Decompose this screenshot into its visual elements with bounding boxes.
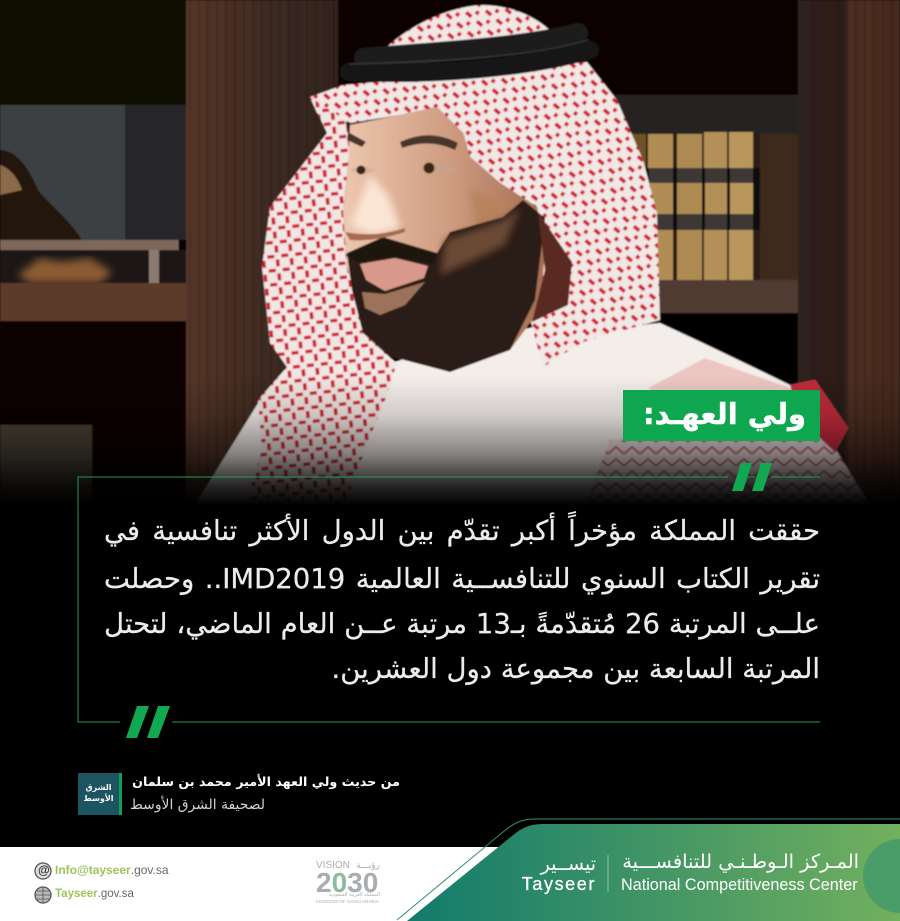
center name — [621, 850, 859, 894]
green banner — [407, 824, 900, 921]
source text: من حديث ولي العهد الأمير محمد بن سلمان — [132, 774, 400, 789]
shemagh: right drape — [310, 62, 660, 367]
lips — [360, 258, 428, 291]
quote text: حققت المملكة مؤخراً أكبر تقدّم بين الدول الأكثر تنافسية في — [104, 515, 820, 547]
quote text: علــى المرتبة 26 مُتقدّمةً بـ13 مرتبة عــن العام الماضي، لتحتل — [104, 608, 820, 640]
shemagh: left drape — [245, 97, 397, 505]
tayseer logo: Tayseer — [522, 874, 596, 894]
footer band — [0, 818, 900, 921]
contact website — [34, 886, 134, 904]
face — [343, 107, 545, 372]
igal — [349, 33, 590, 73]
center name: National Competitiveness Center — [621, 876, 858, 894]
vision 2030 logo: رؤيـــة — [356, 861, 380, 871]
white footer panel — [0, 847, 506, 921]
source text — [130, 774, 400, 813]
contact email: Info@tayseer.gov.sa — [55, 863, 169, 877]
tayseer logo — [522, 853, 596, 894]
icon: opening quote mark — [732, 463, 772, 491]
quote frame — [78, 463, 820, 738]
heading tag: crown prince — [623, 390, 820, 441]
heading tag: crown prince: ولي العهـد: — [643, 397, 806, 431]
thobe shoulders — [195, 320, 870, 505]
source text: لصحيفة الشرق الأوسط — [130, 797, 265, 813]
vision 2030 logo: KINGDOM OF SAUDI ARABIA — [316, 899, 379, 904]
contact website: Tayseer.gov.sa — [55, 888, 134, 900]
vision 2030 logo — [316, 860, 380, 904]
left shelf background — [0, 0, 338, 505]
contact email — [34, 862, 169, 880]
vision 2030 logo: المملكة العربية السعودية — [329, 892, 380, 898]
shemagh: crown — [388, 5, 555, 60]
quote text: المرتبة السابعة بين مجموعة دول العشرين. — [331, 653, 820, 685]
vision 2030 logo: VISION — [316, 860, 350, 871]
center name: المـركز الـوطـنـي للتنافســـية — [622, 850, 859, 873]
source logo: الأوسط — [83, 794, 114, 803]
right shelf background — [338, 0, 900, 505]
tayseer logo: تيســير — [541, 853, 596, 875]
quote text — [104, 511, 820, 686]
icon: closing quote mark — [126, 706, 170, 738]
quote text: تقرير الكتاب السنوي للتنافســية العالمية IMD2019.. وحصلت — [104, 563, 820, 595]
source logo — [78, 773, 122, 815]
beard — [347, 200, 545, 372]
eyes and brows — [400, 135, 458, 150]
photo: crown prince in library — [0, 0, 900, 502]
vision 2030 logo: 2030 — [316, 867, 378, 898]
contact email: @ — [38, 863, 50, 877]
source logo: الشرق — [85, 783, 112, 792]
